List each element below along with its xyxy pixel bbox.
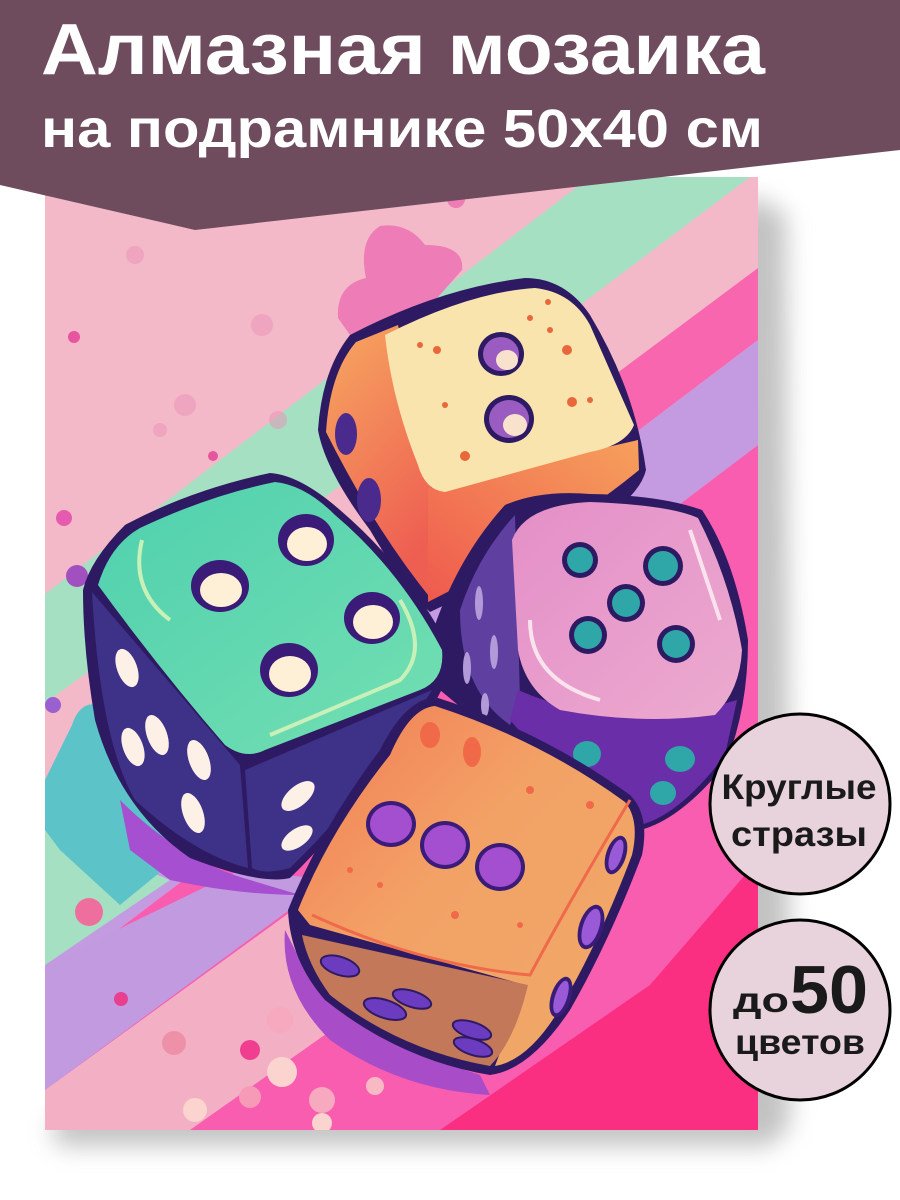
pips	[191, 514, 400, 697]
pips	[562, 542, 695, 663]
painting: dice artwork	[45, 177, 758, 1133]
die: green four	[83, 473, 450, 879]
badge: up to 50 colours: цветов	[735, 1023, 865, 1062]
title	[41, 10, 766, 159]
die: purple five	[430, 493, 748, 830]
pips	[366, 801, 525, 891]
background stripes	[45, 177, 758, 1130]
badge: up to 50 colours: 50	[790, 952, 868, 1028]
badge: up to 50 colours: до	[733, 981, 789, 1020]
subtitle: на подрамнике 50х40 см	[41, 99, 763, 159]
paint splat top	[338, 225, 462, 340]
badge: round rhinestones: стразы	[731, 815, 867, 854]
die: orange three	[288, 697, 644, 1075]
splatter dots	[45, 190, 465, 1133]
die: yellow two	[318, 278, 646, 612]
pips	[478, 332, 524, 376]
canvas shadow	[50, 195, 790, 1146]
header banner	[0, 0, 900, 230]
badge: round rhinestones: Круглые	[722, 768, 876, 807]
title: Алмазная мозаика	[41, 10, 766, 90]
badge: up to 50 colours	[710, 920, 890, 1100]
badge: round rhinestones	[710, 714, 890, 894]
